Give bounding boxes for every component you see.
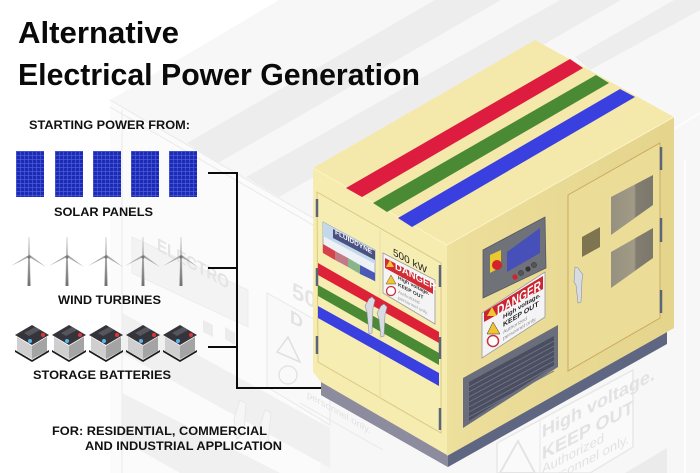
danger sign left door	[383, 253, 437, 324]
danger sign right face	[482, 272, 545, 358]
right door	[568, 143, 661, 371]
application note	[52, 424, 282, 453]
company and flags sticker: FLUIDDYNE	[335, 229, 372, 256]
top face	[313, 40, 674, 245]
left double door	[317, 192, 441, 433]
door stripes	[318, 263, 439, 343]
hinges	[317, 199, 440, 430]
generator cabinet	[313, 40, 674, 467]
application note: FOR: RESIDENTIAL, COMMERCIAL	[52, 424, 267, 438]
ghosted background enlargement of the generator: ELECTRO	[157, 235, 229, 294]
ventilation louver	[463, 325, 558, 428]
connector lines	[208, 173, 321, 388]
left door handles	[365, 297, 387, 337]
danger sign left door: DANGER	[395, 261, 437, 294]
label: wind turbines: WIND TURBINES	[58, 293, 161, 307]
danger sign left door: personnel only.	[398, 295, 428, 317]
danger sign right face: DANGER	[497, 278, 541, 320]
handle	[574, 267, 583, 303]
danger sign right face: personnel only.	[503, 316, 537, 342]
base	[321, 332, 667, 467]
title: Alternative	[18, 15, 179, 50]
ghost danger sign: High voltage.	[542, 364, 655, 443]
icons: solar panels	[16, 151, 197, 197]
ghost danger sign: KEEP OUT	[542, 397, 634, 465]
capacity label: 500 kW	[393, 247, 428, 277]
application note: AND INDUSTRIAL APPLICATION	[85, 439, 282, 453]
right face	[447, 117, 674, 456]
label: solar panels: SOLAR PANELS	[54, 205, 153, 219]
hinges	[660, 147, 662, 313]
ghost danger sign	[497, 364, 667, 473]
door windows	[611, 175, 653, 235]
title: Electrical Power Generation	[18, 57, 420, 92]
title	[18, 15, 420, 92]
danger sign right face: High voltage.	[503, 292, 541, 321]
ghosted background enlargement of the generator: personnel only.	[307, 390, 371, 437]
icons: storage batteries	[15, 325, 197, 362]
left face	[313, 168, 447, 455]
danger sign left door: Authorized	[398, 289, 420, 306]
label: storage batteries: STORAGE BATTERIES	[33, 368, 171, 382]
danger sign right face: Authorized	[503, 316, 527, 336]
ghosted background enlargement of the generator: D	[290, 307, 303, 334]
top stripes	[346, 59, 635, 227]
company and flags sticker	[323, 222, 375, 281]
control panel	[483, 217, 546, 298]
icons: wind turbines	[11, 237, 198, 286]
ghosted background enlargement of the generator: 50	[292, 277, 316, 314]
danger sign left door: KEEP OUT	[398, 282, 424, 301]
danger sign right face: KEEP OUT	[503, 299, 539, 329]
danger sign left door: High voltage.	[398, 275, 430, 297]
heading: starting power: STARTING POWER FROM:	[29, 118, 190, 132]
